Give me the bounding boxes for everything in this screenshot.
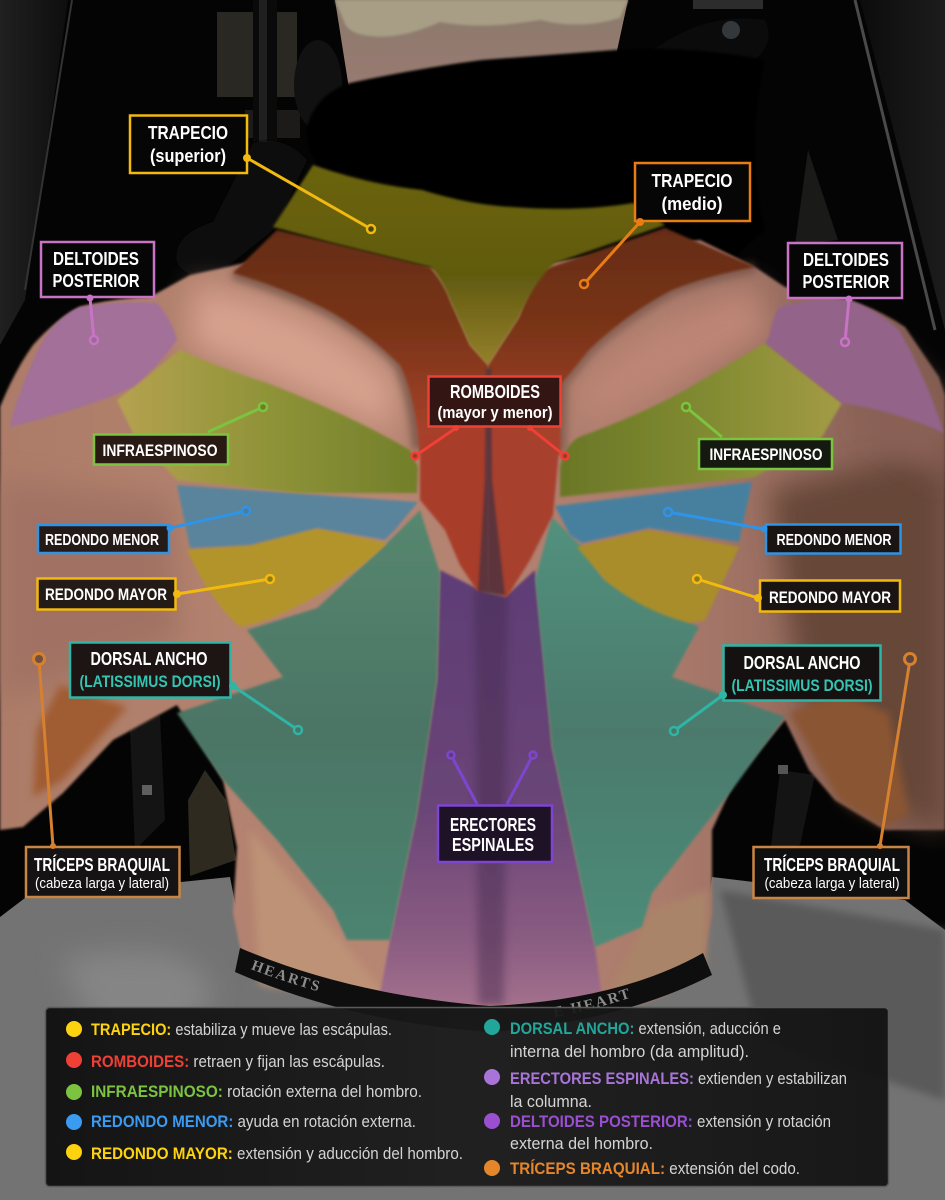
label: erectores espinales: ESPINALES: [452, 835, 534, 855]
label: triceps right: TRÍCEPS BRAQUIAL: [764, 854, 900, 875]
label: romboides: (mayor y menor): [438, 404, 552, 422]
label: triceps left: (cabeza larga y lateral): [35, 876, 169, 892]
muscle: romboides left: [420, 425, 488, 592]
label: trapecio superior: [130, 116, 375, 233]
label: redondo menor right: REDONDO MENOR: [776, 532, 892, 549]
legend item: redondo mayor: REDONDO MAYOR: extensión y aducción del hombro.: [91, 1145, 463, 1163]
black collar towel: [176, 49, 765, 276]
muscle: redondo menor left: [177, 485, 418, 548]
label: redondo menor right: [664, 508, 900, 554]
legend item: romboides: ROMBOIDES: retraen y fijan las escápulas.: [91, 1053, 385, 1071]
panel: legend: [46, 1008, 888, 1186]
label: infraespinoso left: [94, 403, 267, 464]
label: dorsal ancho left: [70, 642, 302, 734]
legend item: erectores espinales: [484, 1069, 847, 1111]
muscle: triceps left: [33, 685, 127, 797]
neck and hair: [335, 0, 628, 95]
label: dorsal ancho left: (LATISSIMUS DORSI): [80, 672, 220, 691]
muscle: redondo mayor right: [577, 530, 739, 623]
legend item: dorsal ancho: interna del hombro (da amplitud).: [510, 1043, 749, 1061]
label: deltoides posterior left: [41, 242, 154, 344]
label: dorsal ancho left: DORSAL ANCHO: [90, 649, 208, 669]
skin shading: [0, 267, 945, 1005]
muscle: infraespinoso left: [117, 350, 418, 493]
label: deltoides posterior right: POSTERIOR: [802, 272, 890, 292]
muscle: deltoides left: [10, 302, 177, 427]
label: redondo menor left: [38, 507, 250, 553]
label: infraespinoso right: [682, 403, 832, 469]
legend item: dorsal ancho: [484, 1019, 781, 1061]
muscle: romboides right: [488, 425, 560, 597]
legend item: infraespinoso: INFRAESPINOSO: rotación externa del hombro.: [91, 1083, 422, 1101]
legend item: erectores espinales: la columna.: [510, 1093, 592, 1111]
legend item: triceps braquial: TRÍCEPS BRAQUIAL: extensión del codo.: [510, 1159, 800, 1178]
label: redondo menor left: REDONDO MENOR: [45, 532, 159, 549]
label: trapecio medio: TRAPECIO: [652, 171, 732, 191]
label: redondo mayor left: [38, 575, 274, 610]
waistband: CHROME HEART: [554, 988, 628, 1016]
legend item: dorsal ancho: DORSAL ANCHO: extensión, aducción e: [510, 1020, 781, 1038]
label: trapecio medio: [580, 163, 750, 288]
label: redondo mayor left: REDONDO MAYOR: [45, 585, 167, 604]
label: triceps left: [26, 654, 180, 897]
label: deltoides posterior left: DELTOIDES: [53, 249, 139, 269]
waistband: [235, 948, 712, 1016]
label: dorsal ancho right: DORSAL ANCHO: [744, 653, 860, 673]
label: triceps right: (cabeza larga y lateral): [764, 876, 900, 892]
muscle: redondo mayor left: [187, 528, 387, 627]
label: trapecio medio: (medio): [662, 194, 723, 214]
label: romboides: [412, 376, 568, 460]
legend item: redondo menor: REDONDO MENOR: ayuda en rotación externa.: [91, 1113, 416, 1131]
muscle: triceps right: [789, 693, 909, 827]
back skin silhouette: [0, 240, 945, 1010]
muscle: latissimus dorsi right: [535, 517, 785, 947]
muscle: erectores espinales: [378, 570, 603, 1005]
label: dorsal ancho right: (LATISSIMUS DORSI): [732, 676, 872, 695]
grey pants: [0, 877, 945, 1200]
label: dorsal ancho right: [670, 646, 880, 735]
label: deltoides posterior left: POSTERIOR: [52, 271, 140, 291]
label: trapecio superior: TRAPECIO: [148, 123, 228, 143]
label: trapecio superior: (superior): [150, 146, 226, 166]
label: triceps left: TRÍCEPS BRAQUIAL: [34, 854, 170, 875]
legend item: erectores espinales: ERECTORES ESPINALES: extienden y estabilizan: [510, 1070, 847, 1088]
legend item: trapecio: TRAPECIO: estabiliza y mueve las escápulas.: [91, 1021, 392, 1039]
label: redondo mayor right: REDONDO MAYOR: [769, 588, 891, 607]
legend item: deltoides posterior: [484, 1113, 831, 1153]
legend item: deltoides posterior: DELTOIDES POSTERIOR: extensión y rotación: [510, 1113, 831, 1131]
label: redondo mayor right: [693, 575, 900, 612]
label: deltoides posterior right: [788, 243, 902, 346]
muscle: trapecio medio right: [488, 228, 755, 455]
label: erectores espinales: [438, 752, 552, 862]
muscle: infraespinoso right: [560, 343, 842, 497]
muscle: latissimus dorsi left: [177, 510, 440, 940]
label: triceps right: [754, 654, 916, 898]
muscle: deltoides right: [765, 300, 944, 433]
muscle: trapecio superior: [273, 165, 665, 365]
label: romboides: ROMBOIDES: [450, 382, 540, 402]
muscle: trapecio medio left: [233, 230, 488, 455]
spine column: [478, 368, 505, 595]
label: deltoides posterior right: DELTOIDES: [803, 250, 889, 270]
label: infraespinoso left: INFRAESPINOSO: [102, 441, 218, 460]
label: erectores espinales: ERECTORES: [450, 815, 536, 835]
legend item: deltoides posterior: externa del hombro.: [510, 1135, 653, 1153]
label: infraespinoso right: INFRAESPINOSO: [710, 445, 822, 464]
gym machine behind left arm: [188, 770, 236, 876]
muscle: redondo menor right: [555, 482, 752, 543]
